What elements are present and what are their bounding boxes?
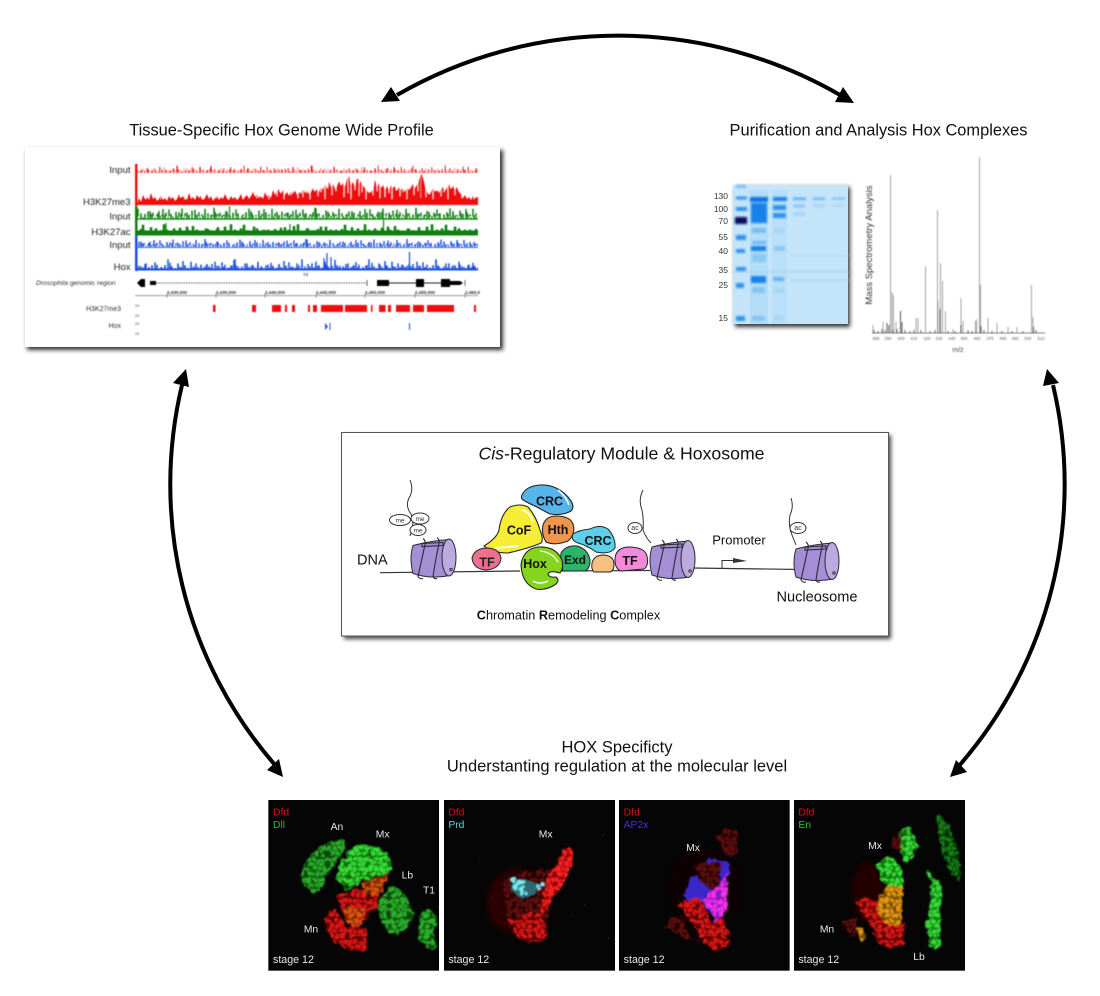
protein: Exd [561, 546, 590, 571]
nucleosome 2 [650, 539, 695, 580]
labels: Lb [913, 952, 925, 963]
protein: left TF [472, 548, 501, 570]
histone tail with acetyl mark 2 [628, 490, 651, 543]
H3K27me3 peak bars [213, 305, 476, 312]
m/z tick labels: 430 [935, 336, 943, 341]
labels: Mx [868, 841, 883, 852]
labels: stage 12 [273, 954, 314, 966]
track: Hox [137, 252, 478, 270]
genomic ruler: 2,460,0 [465, 290, 481, 295]
labels: stage 12 [624, 954, 665, 966]
track: H3K27me3 [137, 166, 478, 205]
protein: right TF: TF [622, 554, 638, 568]
track labels: Input [109, 165, 131, 176]
m/z tick labels: 380 [872, 336, 880, 341]
track labels: Hox [114, 262, 131, 273]
m/z tick labels [872, 336, 1045, 341]
track: H3K27ac [137, 220, 478, 236]
heading: HOX specificity [447, 738, 787, 776]
panel: cis-regulatory module [342, 432, 891, 639]
nucleosome 1 [411, 538, 456, 579]
heading: HOX specificity: HOX Specificty [562, 738, 673, 756]
small track scale marks [135, 304, 139, 336]
labels: Mn [304, 924, 318, 935]
track labels [83, 165, 131, 273]
labels: Lb [402, 871, 413, 882]
histone tail with methyl marks: me [413, 528, 423, 534]
track labels: Input [109, 212, 131, 222]
label: scale unit: fdr [303, 272, 309, 277]
image: Dfd AP2x embryo [619, 800, 790, 971]
small track scale marks: 00 [135, 332, 139, 336]
labels: Dfd [624, 807, 640, 818]
genomic ruler: 2,435,000 [216, 290, 237, 295]
labels [448, 807, 553, 966]
m/z tick labels: 480 [999, 336, 1007, 341]
labels: stage 12 [448, 954, 489, 966]
labels: Mx [376, 830, 390, 841]
labels: AP2x [624, 820, 649, 831]
DNA line [380, 568, 838, 573]
label: promoter: Promoter [712, 532, 766, 548]
protein: Exd: Exd [564, 553, 586, 567]
labels: Mx [686, 843, 701, 854]
label: chromatin remodeling complex: Chromatin Remodeling Complex [477, 608, 661, 622]
protein: Hth: Hth [548, 523, 568, 537]
label: nucleosome: Nucleosome [776, 590, 858, 606]
label: H3K27me3 peaks: H3K27me3 [86, 306, 121, 313]
gel bands [733, 185, 848, 321]
promoter arrow [722, 558, 747, 568]
labels: stage 12 [798, 954, 839, 966]
nucleosome 3 [794, 541, 839, 582]
panel: protein gel [733, 185, 850, 327]
panel: genome browser card [25, 147, 503, 350]
histone tail with methyl marks: me [415, 516, 425, 523]
track: blue input [137, 238, 478, 248]
m/z tick labels: 510 [1037, 336, 1045, 341]
histone tail with methyl marks: me [395, 518, 405, 524]
x-axis title: m/z [952, 347, 964, 354]
image: Dfd En embryo [794, 800, 965, 971]
labels: Dfd [448, 807, 465, 818]
protein: CoF [484, 505, 542, 553]
labels: Mx [539, 830, 553, 841]
microscopy panels 1 and 2 [268, 800, 615, 971]
gel molecular weight labels: 35 [719, 265, 728, 275]
labels [273, 807, 435, 966]
protein: right CRC: CRC [584, 534, 612, 548]
protein: Hth [542, 516, 574, 544]
m/z tick labels: 500 [1024, 336, 1032, 341]
gel molecular weight labels: 130 [714, 191, 728, 201]
protein: right CRC [572, 526, 615, 553]
heading: purification and analysis: Purification and Analysis Hox Complexes [730, 122, 1027, 140]
gel molecular weight labels: 40 [719, 246, 728, 256]
m/z tick labels: 460 [973, 336, 981, 341]
gel molecular weight labels: 25 [719, 280, 728, 290]
histone tail with acetyl mark 2: ac [631, 525, 639, 532]
track labels: H3K27ac [91, 227, 131, 238]
gel lane smears [750, 190, 787, 324]
labels: Dll [273, 820, 285, 831]
gel molecular weight labels: 70 [719, 216, 728, 226]
protein: Hox [521, 547, 563, 589]
m/z tick labels: 490 [1011, 336, 1019, 341]
side colour bars [135, 164, 138, 271]
m/z tick labels: 400 [897, 336, 905, 341]
label: Drosophila genomic region: Drosophila genomic region [36, 280, 116, 287]
track labels: H3K27me3 [83, 197, 130, 208]
genomic ruler: 2,450,000 [365, 290, 386, 295]
histone tail with acetyl mark 3 [789, 498, 806, 545]
protein: CoF: CoF [507, 524, 532, 538]
gene model [137, 279, 465, 287]
histone tail with methyl marks [390, 480, 429, 536]
gel molecular weight labels: 55 [719, 232, 728, 242]
m/z tick labels: 440 [948, 336, 956, 341]
labels [624, 807, 701, 966]
labels [798, 807, 925, 966]
protein: right TF [615, 547, 648, 571]
spectrum peaks [872, 157, 1045, 333]
image: Dfd Prd embryo [444, 800, 615, 971]
m/z tick labels: 390 [884, 336, 892, 341]
labels: Dfd [798, 807, 815, 818]
m/z tick labels: 410 [910, 336, 918, 341]
microscopy panels 3 and 4 [619, 800, 965, 971]
m/z tick labels: 470 [986, 336, 994, 341]
labels: Prd [448, 820, 465, 831]
histone tail with acetyl mark 3: ac [794, 525, 802, 532]
gel molecular weight labels [714, 191, 728, 323]
protein: top CRC [521, 485, 573, 515]
genomic ruler: 2,430,000 [167, 290, 188, 295]
genomic ruler: 2,445,000 [316, 290, 337, 295]
label: Hox peaks: Hox [109, 323, 121, 330]
genomic ruler [135, 290, 481, 298]
labels: An [331, 822, 344, 833]
y-axis title: Mass Spectrometry Analysis [864, 185, 875, 305]
m/z tick labels: 450 [960, 336, 968, 341]
arrow: right double-headed arc [950, 369, 1065, 777]
gel molecular weight labels: 15 [719, 313, 728, 323]
genomic ruler: 2,440,000 [265, 290, 286, 295]
protein: left TF: TF [479, 556, 495, 570]
small track scale marks: 00 [135, 304, 139, 308]
heading: HOX specificity: Understanting regulation at the molecular level [447, 758, 787, 776]
labels: T1 [423, 885, 435, 896]
image: Dfd Dll embryo [268, 800, 439, 971]
Hox peak marks [325, 323, 410, 330]
protein: top CRC: CRC [536, 494, 563, 508]
protein: small orange [592, 555, 614, 572]
track labels: Input [109, 240, 131, 251]
panel title: Cis-Regulatory Module & Hoxosome [478, 444, 765, 464]
arrow: left double-headed arc [170, 369, 283, 777]
small track scale marks: 00 [135, 314, 139, 318]
heading: tissue-specific profile: Tissue-Specific Hox Genome Wide Profile [129, 122, 434, 140]
labels: En [798, 820, 811, 831]
protein: Hox: Hox [523, 557, 547, 571]
labels: Dfd [273, 807, 289, 818]
genomic ruler: 2,455,000 [415, 290, 436, 295]
label: DNA: DNA [357, 552, 388, 568]
arrow: top double-headed arc [381, 36, 854, 103]
track: green input [137, 206, 478, 220]
small track scale marks: 00 [135, 322, 139, 326]
m/z tick labels: 420 [923, 336, 931, 341]
gel molecular weight labels: 100 [714, 204, 728, 214]
track: red input [137, 165, 478, 173]
chart: mass spectrum [864, 157, 1045, 354]
labels: Mn [820, 924, 834, 935]
